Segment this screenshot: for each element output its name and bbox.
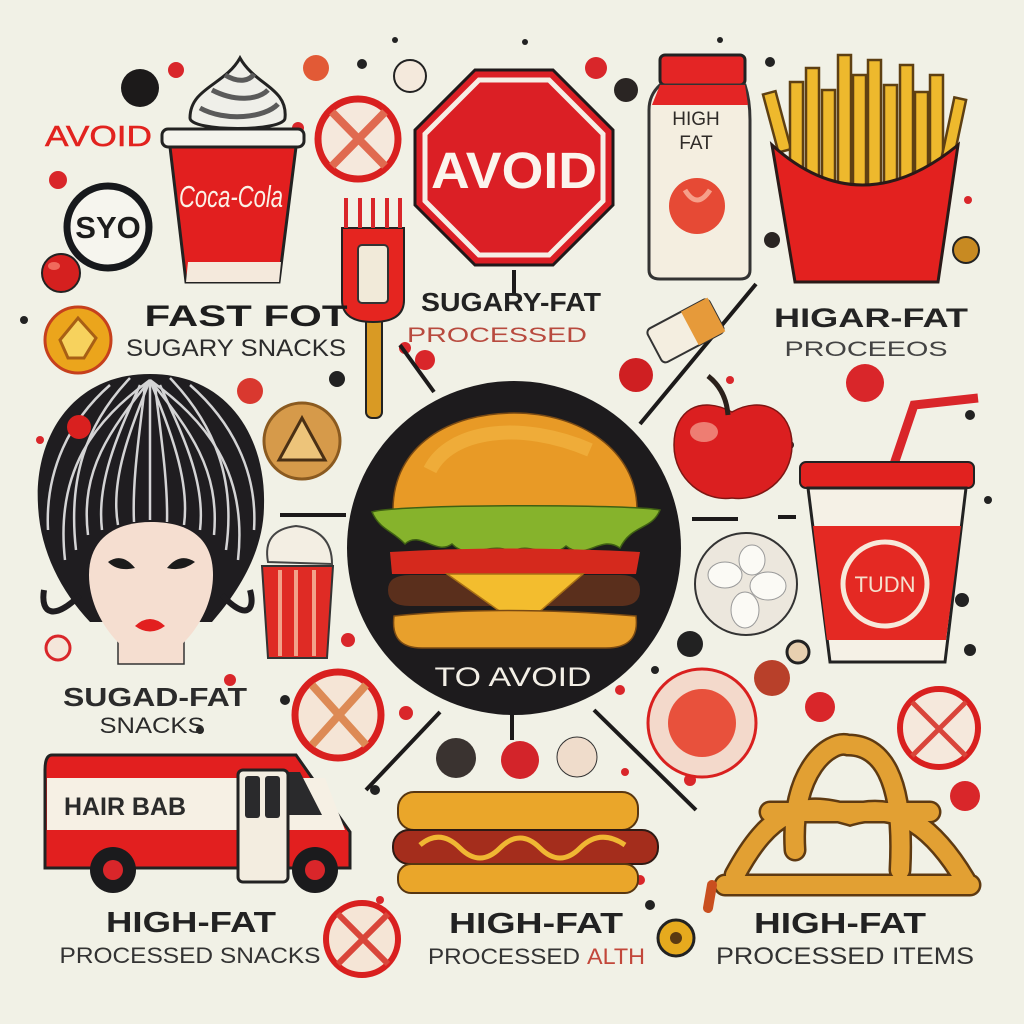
label: high-fat processed alth <box>428 908 645 969</box>
label: fast food: FAST FOT <box>144 300 348 333</box>
icon: sushi roll <box>646 298 725 364</box>
icon: soda cup with straw <box>800 398 978 662</box>
icon: red tomato <box>42 254 80 292</box>
icon: whipped drink cup <box>162 58 304 282</box>
stop sign <box>415 70 613 265</box>
icon: high fat jar <box>649 55 750 279</box>
label: high-fat processed items <box>716 908 974 970</box>
label: fast food <box>126 300 348 362</box>
icon: red plate <box>648 669 756 777</box>
label: high-fat processed alth: PROCESSED <box>428 944 580 969</box>
label: sugad-fat snacks <box>63 682 247 738</box>
icon: prohibition sign left <box>295 672 381 758</box>
label: high-fat processed snacks: PROCESSED SNACKS <box>60 943 320 968</box>
icon: burger <box>372 413 660 648</box>
icon: food truck: HAIR BAB <box>64 793 186 821</box>
label: high-fat processed items: PROCESSED ITEMS <box>716 943 974 970</box>
icon: food truck <box>45 755 350 893</box>
icon: prohibition sign right <box>900 689 978 767</box>
icon: white snack bowl <box>695 533 797 635</box>
label: sugary-fat: SUGARY-FAT <box>421 287 601 317</box>
label: sugad-fat snacks: SUGAD-FAT <box>63 682 247 712</box>
icon: prohibition sign bottom <box>326 903 398 975</box>
label: high-fat processed alth: HIGH-FAT <box>449 908 623 940</box>
icon: big hair woman <box>38 374 264 664</box>
icon: gold coin <box>264 403 340 479</box>
label: sugary-fat <box>407 287 601 347</box>
icon: high fat jar: FAT <box>679 133 713 154</box>
icon: whipped drink cup: Coca-Cola <box>179 179 283 214</box>
icon: french fries <box>763 55 966 282</box>
label: fast food: SUGARY SNACKS <box>126 335 346 362</box>
icon: red apple <box>674 376 792 498</box>
label: to avoid: TO AVOID <box>434 662 592 692</box>
icon: syo badge <box>67 186 149 268</box>
label: avoid: AVOID <box>45 121 152 153</box>
label: high-fat top right: HIGAR-FAT <box>774 303 969 333</box>
label: sugary-fat: PROCESSED <box>407 324 587 347</box>
icon: soda cup with straw: TUDN <box>854 572 916 597</box>
label: high-fat processed snacks <box>60 907 320 968</box>
stop sign: AVOID <box>431 142 597 199</box>
icon: hot dog <box>393 792 658 893</box>
label: high-fat top right <box>774 303 969 361</box>
icon: syo badge: SYO <box>75 210 141 245</box>
label: sugad-fat snacks: SNACKS <box>100 713 204 738</box>
label: high-fat top right: PROCEEOS <box>784 338 948 361</box>
icon: prohibition sign top <box>318 99 398 179</box>
label: high-fat processed alth: ALTH <box>587 944 645 969</box>
icon: popcorn drink <box>262 526 333 658</box>
icon: red fork <box>342 198 404 418</box>
icon: pretzel <box>708 744 970 908</box>
icon: high fat jar: HIGH <box>672 109 720 130</box>
icon: gold face coin <box>658 920 694 956</box>
central circle <box>347 381 681 715</box>
connector lines <box>280 270 796 810</box>
icon: orange snack <box>45 307 111 373</box>
label: high-fat processed snacks: HIGH-FAT <box>106 907 276 939</box>
label: high-fat processed items: HIGH-FAT <box>754 908 926 940</box>
